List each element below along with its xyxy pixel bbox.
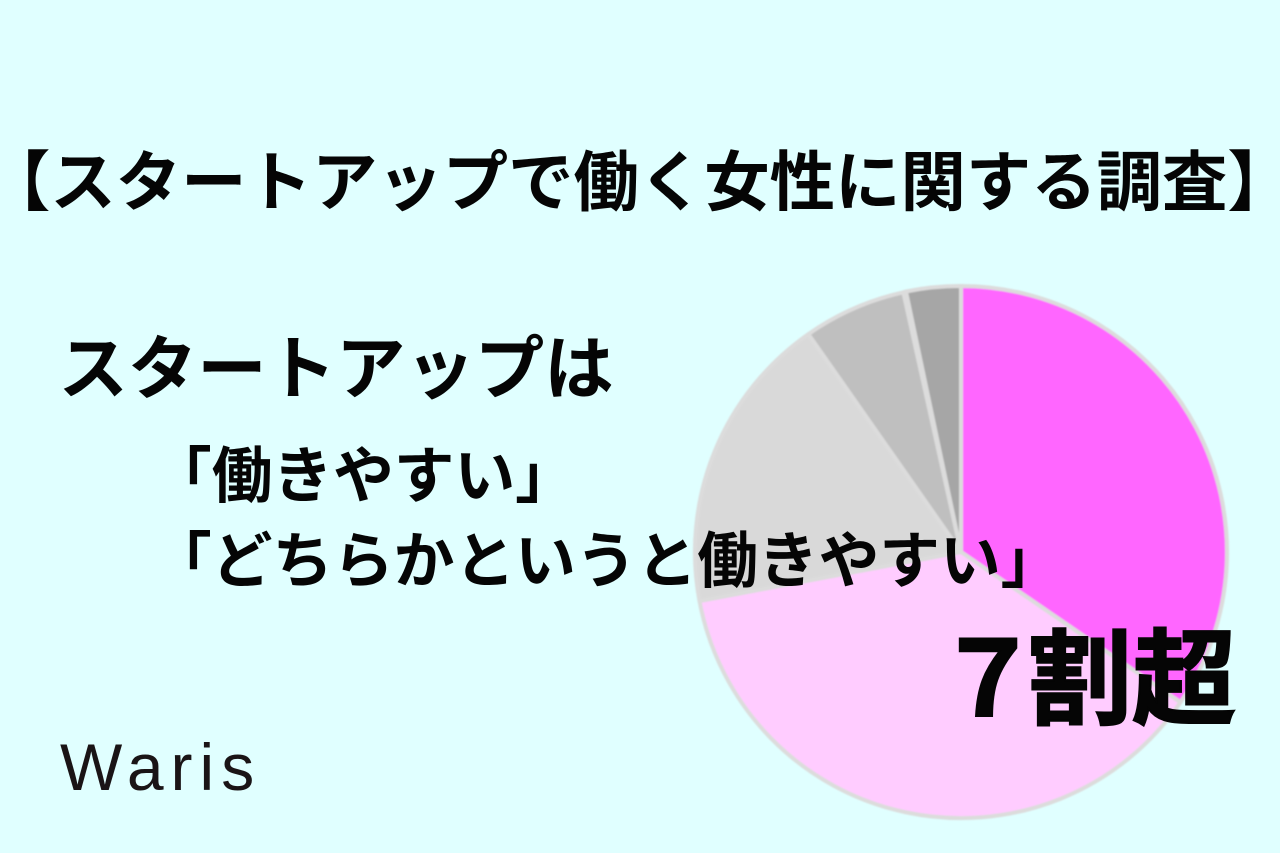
slice: 働きにくい [808, 292, 961, 552]
slice: その他 [903, 292, 961, 552]
slice: どちらかというと働きにくい [695, 334, 961, 601]
logo: Waris: Waris [60, 730, 261, 804]
text: どちらかというと働きやすい: 「どちらかというと働きやすい」 [151, 527, 1061, 595]
slice: 働きやすい [961, 286, 1227, 702]
pie chart [695, 286, 1227, 818]
callout: 7割超: ７ [936, 623, 1040, 739]
callout: 7割超: 割超 [1028, 623, 1236, 739]
slice: どちらかというと働きやすい [700, 552, 1180, 818]
text: 働きやすい: 「働きやすい」 [151, 442, 576, 510]
title: 【スタートアップで働く女性に関する調査】 [0, 146, 1280, 219]
slice: 無回答 [906, 286, 961, 552]
subheading: スタートアップは [58, 330, 614, 408]
